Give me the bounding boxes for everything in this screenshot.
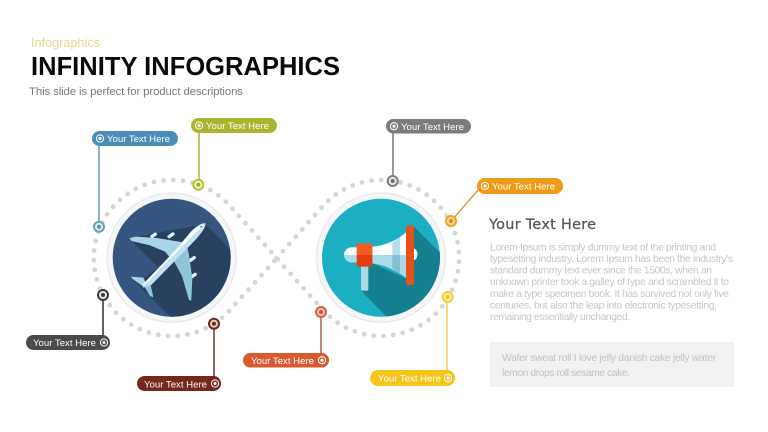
note box: lemon drops roll sesame cake. (502, 368, 630, 379)
callout: maroon (137, 319, 221, 391)
callout: yellow (370, 292, 455, 386)
callout: red-orange (243, 307, 329, 368)
body paragraph (490, 243, 733, 323)
note box (490, 342, 734, 387)
body paragraph: unknown printer took a galley of type and scrambled it to (490, 277, 729, 288)
callout: blue (92, 131, 178, 232)
callout: green (191, 118, 277, 190)
callout: red-orange: Your Text Here (251, 356, 314, 367)
callout: grey: Your Text Here (401, 122, 464, 133)
callout: green: Your Text Here (206, 121, 269, 132)
dotted infinity path (94, 180, 459, 336)
callout: grey (386, 119, 471, 186)
body paragraph: centuries, but also the leap into electronic typesetting, (490, 300, 717, 311)
callout: dark (26, 290, 110, 350)
callout: blue: Your Text Here (107, 134, 170, 145)
body paragraph: remaining essentially unchanged. (490, 312, 630, 323)
body paragraph: typesetting industry. Lorem Ipsum has been the industry's (490, 254, 733, 265)
callout: orange: Your Text Here (492, 182, 555, 193)
icon: megaphone badge (316, 192, 446, 323)
body paragraph: Lorem Ipsum is simply dummy text of the printing and (490, 243, 716, 254)
body paragraph: standard dummy text ever since the 1500s, when an (490, 266, 712, 277)
subtitle: This slide is perfect for product descriptions (29, 86, 243, 98)
title: INFINITY INFOGRAPHICS (31, 53, 340, 81)
callout: orange (446, 178, 563, 226)
body paragraph: make a type specimen book. It has survived not only five (490, 289, 729, 300)
icon: airplane badge (106, 192, 237, 323)
eyebrow label: Infographics (31, 36, 100, 50)
callout: dark: Your Text Here (33, 338, 96, 349)
panel heading: Your Text Here (488, 217, 596, 233)
note box: Wafer sweat roll I love jelly danish cake jelly water (502, 353, 717, 364)
callout: yellow: Your Text Here (378, 374, 441, 385)
callout: maroon: Your Text Here (144, 379, 207, 390)
